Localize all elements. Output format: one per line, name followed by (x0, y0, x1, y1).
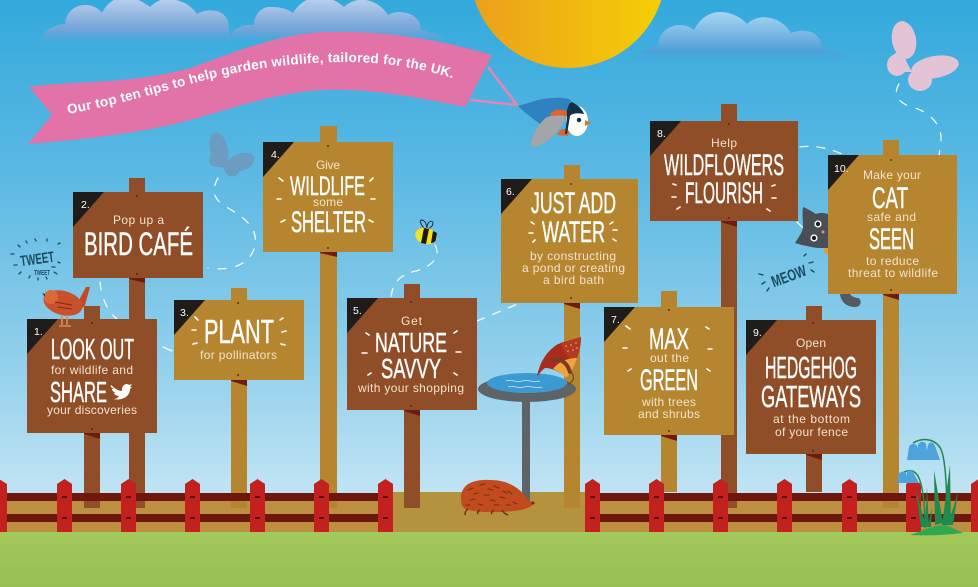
sign 3: plant (174, 288, 304, 508)
nails on the signs (91, 123, 892, 452)
sign 8: wildflowers (650, 104, 798, 508)
puffin (518, 98, 591, 147)
drinking bird (537, 337, 581, 384)
sign 6: just add water: WATER (542, 216, 605, 249)
flight paths (100, 84, 941, 351)
sign 5: nature savvy: Get (401, 314, 423, 328)
sign 4: wildlife shelter: WILDLIFE (290, 171, 365, 201)
sign 7: max out the green: 7. (611, 314, 620, 326)
sign 6: just add water: JUST ADD (531, 187, 616, 220)
sign 2: bird cafe (73, 178, 203, 508)
ground band (0, 492, 978, 532)
sign 9: hedgehog gateways: of your fence (775, 425, 848, 439)
cloud top right (630, 12, 850, 60)
blue butterfly (206, 131, 257, 176)
sign 10: cat: to reduce (866, 254, 919, 268)
meow label (759, 254, 814, 291)
sign 4: wildlife shelter (263, 126, 393, 508)
sign 9: hedgehog gateways: HEDGEHOG (765, 350, 857, 385)
bluebells (897, 440, 963, 535)
sign 6: just add water: a bird bath (543, 273, 604, 287)
banner string (470, 67, 517, 105)
bee (413, 220, 439, 247)
sign 8: wildflowers: Help (711, 136, 737, 150)
sign 1: look out and share: LOOK OUT (51, 334, 134, 366)
sign 8: wildflowers: 8. (657, 128, 666, 140)
sign 8: wildflowers: WILDFLOWERS (664, 149, 784, 182)
sign 9: hedgehog gateways: GATEWAYS (761, 379, 861, 414)
sign 1: look out and share: SHARE (50, 377, 107, 409)
icon: twitter bird (111, 384, 132, 399)
meow label: MEOW (769, 263, 810, 291)
sign 6: just add water (501, 165, 638, 508)
sign 9: hedgehog gateways: at the bottom (773, 412, 850, 426)
sign 7: max out the green: out the (650, 351, 689, 365)
sign 3: plant: PLANT (204, 313, 274, 350)
sign 2: bird cafe: Pop up a (113, 213, 164, 227)
sign 9: hedgehog gateways (746, 306, 876, 492)
sign 3: plant: 3. (180, 307, 189, 319)
sign 5: nature savvy: SAVVY (381, 353, 441, 384)
sign 5: nature savvy (347, 284, 477, 508)
sign 7: max out the green (604, 291, 734, 492)
sign 2: bird cafe: BIRD CAFÉ (84, 226, 193, 262)
pink banner (28, 32, 492, 144)
fence (0, 479, 978, 532)
sign 9: hedgehog gateways: Open (796, 336, 826, 350)
hedgehog (461, 480, 534, 515)
sign 4: wildlife shelter: SHELTER (291, 206, 366, 239)
sign 10: cat: Make your (863, 168, 921, 182)
sign 8: wildflowers: FLOURISH (685, 177, 763, 210)
tweet label (11, 239, 60, 280)
sun (470, 0, 666, 68)
sign 10: cat (828, 140, 957, 508)
sign 7: max out the green: MAX (649, 323, 689, 356)
sign 10: cat: threat to wildlife (848, 266, 938, 280)
sign 10: cat: safe and (867, 210, 916, 224)
wren (41, 286, 90, 326)
sign 6: just add water: 6. (506, 186, 515, 198)
sign 5: nature savvy: with your shopping (357, 381, 464, 395)
sign 1: look out and share: for wildlife and (51, 363, 133, 377)
sign 2: bird cafe: 2. (81, 199, 90, 211)
tweet label: TWEET (19, 249, 55, 270)
sign 7: max out the green: with trees (641, 395, 696, 409)
sign 5: nature savvy: 5. (353, 305, 362, 317)
sign 1: look out and share (27, 306, 157, 508)
sign 4: wildlife shelter: some (313, 195, 343, 209)
sign 10: cat: 10. (834, 163, 849, 175)
sign 10: cat: CAT (872, 182, 908, 215)
sign 3: plant: for pollinators (200, 348, 277, 362)
pink banner: Our top ten tips to help garden wildlife, tailored for the UK. (68, 52, 452, 114)
sign 9: hedgehog gateways: 9. (753, 327, 762, 339)
sign 10: cat: SEEN (869, 223, 914, 256)
sign 4: wildlife shelter: Give (316, 158, 340, 172)
pink butterfly (887, 19, 961, 91)
bird bath (478, 373, 576, 503)
sign 1: look out and share: 1. (34, 326, 43, 338)
sign 6: just add water: a pond or creating (522, 261, 625, 275)
sign 4: wildlife shelter: 4. (271, 149, 280, 161)
cat (795, 207, 861, 307)
sign 7: max out the green: and shrubs (638, 407, 700, 421)
sign 7: max out the green: GREEN (640, 364, 698, 397)
clouds top left (38, 0, 446, 43)
sign 1: look out and share: your discoveries (47, 403, 137, 417)
sign 5: nature savvy: NATURE (375, 327, 447, 358)
tweet label: TWEET (34, 270, 50, 277)
sign 6: just add water: by constructing (530, 249, 616, 263)
grass (0, 532, 978, 587)
